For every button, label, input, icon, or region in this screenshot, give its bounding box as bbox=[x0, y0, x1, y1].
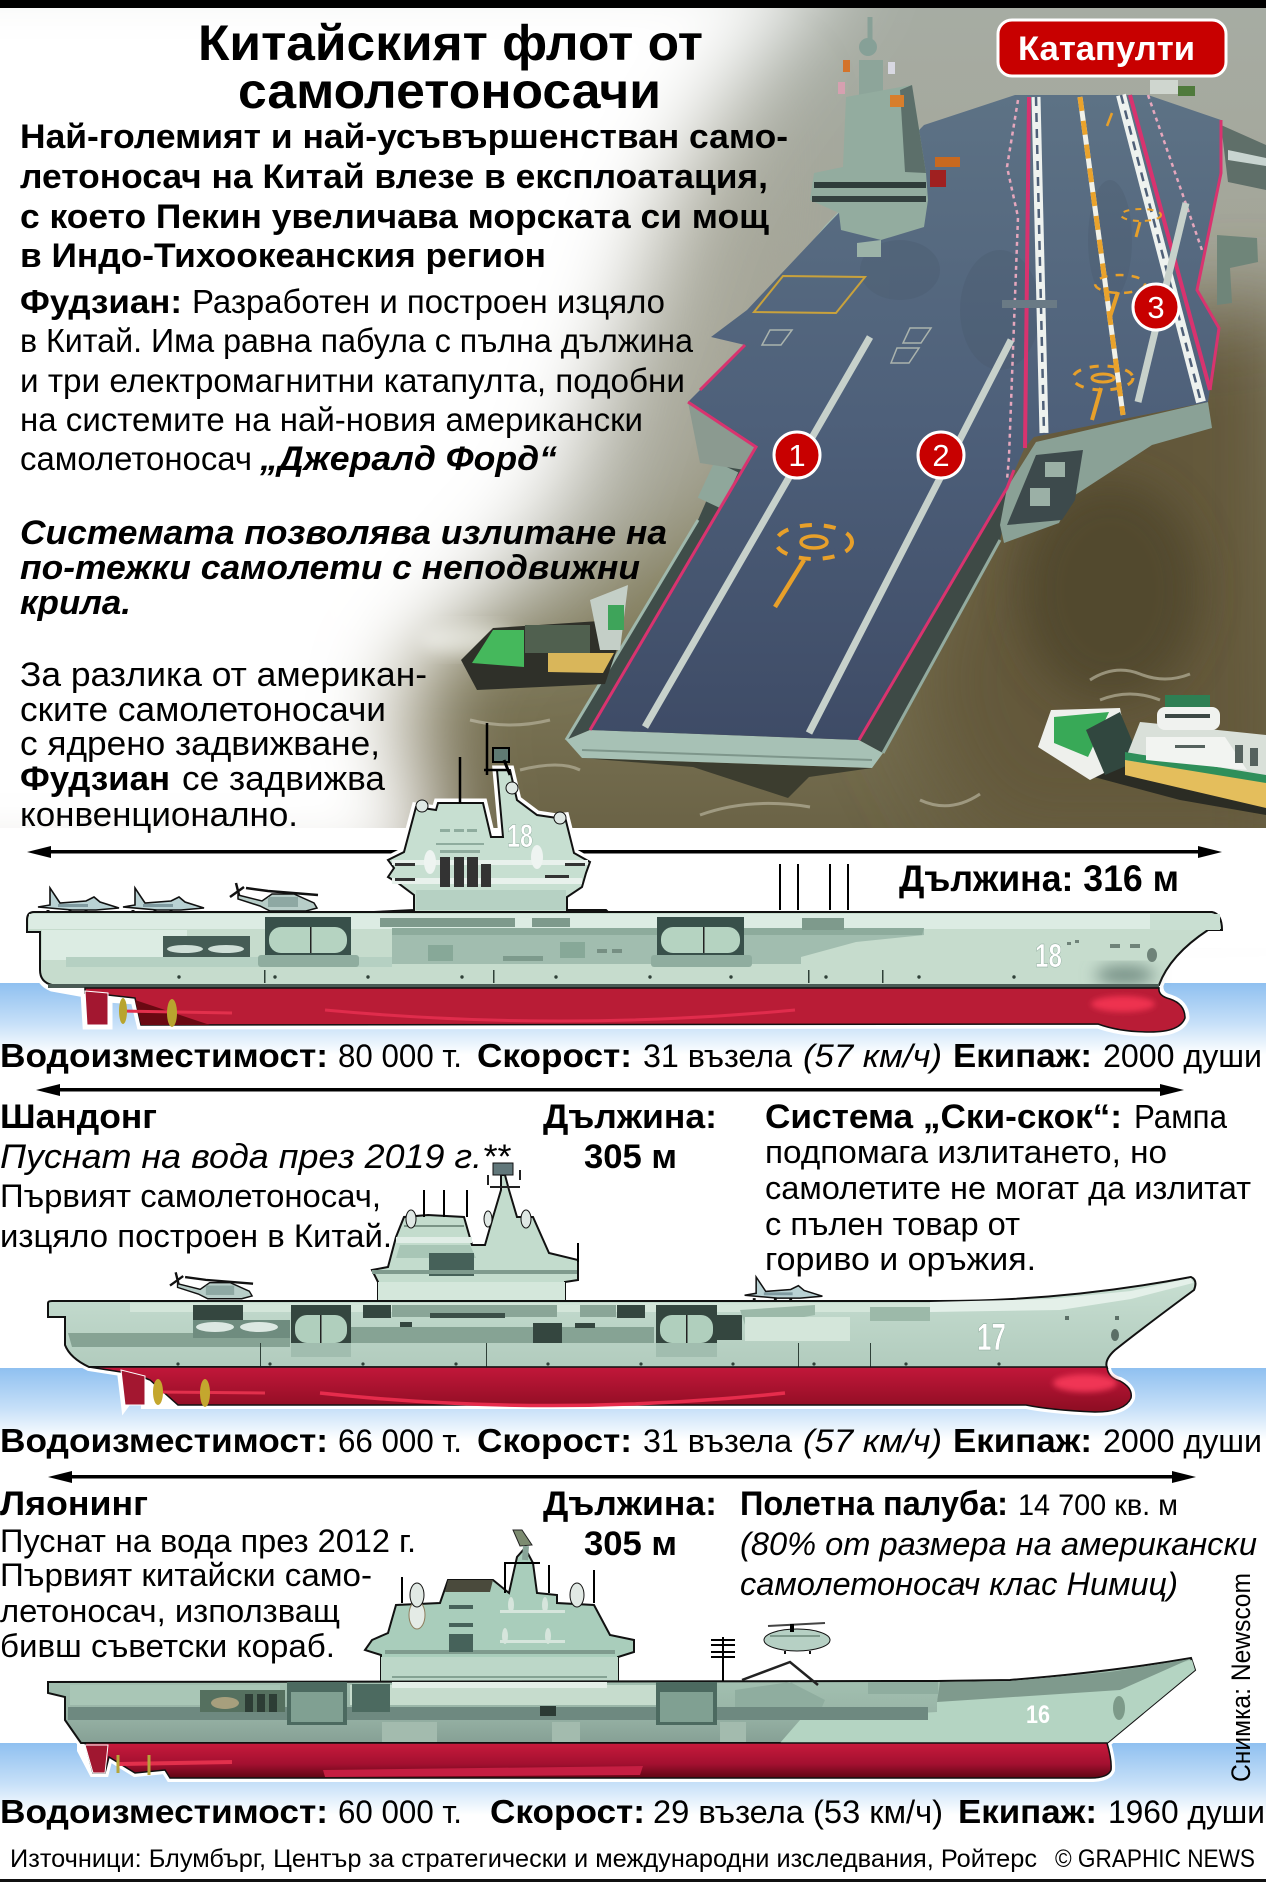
propellers bbox=[153, 1379, 265, 1407]
island bbox=[372, 1163, 578, 1301]
text block: propulsion bbox=[20, 656, 427, 834]
stats: Liaoning: Водоизместимост: bbox=[0, 1793, 328, 1830]
catapult tracks bbox=[645, 203, 1186, 733]
elevators bbox=[287, 1682, 717, 1725]
island bbox=[365, 1530, 634, 1681]
stats: Liaoning: 29 възела (53 км/ч) bbox=[653, 1794, 943, 1830]
lower hull panels bbox=[382, 1722, 746, 1742]
catapult number 2: 2 bbox=[932, 438, 950, 473]
text block: Fujian description: „Джералд Форд“ bbox=[259, 440, 557, 478]
water band: Fujian bbox=[0, 983, 1266, 1055]
text block: Liaoning: Първият китайски само- bbox=[0, 1557, 372, 1593]
text block: propulsion: с ядрено задвижване, bbox=[20, 725, 380, 763]
text block: propulsion: конвенционално. bbox=[20, 796, 298, 834]
forward deck equipment bbox=[735, 1682, 938, 1707]
stats: Shandong: 2000 души bbox=[1103, 1423, 1262, 1459]
right tug boat bbox=[1038, 695, 1266, 815]
text block: propulsion: За разлика от американ- bbox=[20, 656, 427, 694]
ship: Liaoning side view bbox=[48, 1530, 1195, 1778]
deck pink edge lines bbox=[590, 120, 1221, 740]
island outline bbox=[374, 770, 608, 912]
vents row bbox=[392, 1305, 557, 1317]
flight deck bbox=[590, 95, 1221, 740]
catapult number 3 bbox=[1133, 284, 1179, 330]
stats: Shandong: 66 000 т. bbox=[338, 1423, 462, 1459]
text block: ski-jump system: самолетите не могат да излитат bbox=[765, 1170, 1251, 1206]
stats: Fujian: Водоизместимост: bbox=[0, 1037, 328, 1074]
stats: Shandong: 31 възела bbox=[643, 1423, 792, 1459]
text block: Shandong: изцяло построен в Китай. bbox=[0, 1218, 392, 1254]
text block: Fujian description: самолетоносач bbox=[20, 440, 252, 477]
text block: ski-jump system: гориво и оръжия. bbox=[765, 1241, 1036, 1277]
text block: system allows bbox=[20, 514, 667, 622]
text block: Fujian description: и три електромагнитни катапулта, подобни bbox=[20, 362, 685, 399]
hull underside at the bow bbox=[582, 758, 872, 798]
subtitle: в Индо-Тихоокеанския регион bbox=[20, 237, 546, 275]
subtitle bbox=[20, 118, 788, 275]
hull number: 18 bbox=[1035, 937, 1062, 974]
catapult number 2 bbox=[918, 432, 964, 478]
masts bbox=[460, 723, 848, 910]
portholes and ticks bbox=[176, 1343, 1001, 1367]
text block: flight deck: Полетна палуба: bbox=[740, 1485, 1008, 1523]
hangar opening bbox=[200, 1690, 285, 1712]
far tug boat bbox=[1150, 80, 1195, 96]
hull upper bbox=[27, 912, 1222, 985]
deck crane bbox=[742, 1662, 818, 1685]
title: Китайският флот от bbox=[198, 15, 703, 71]
length label: Shandong bbox=[543, 1098, 717, 1176]
helicopter bbox=[764, 1623, 830, 1654]
helicopter bbox=[170, 1272, 253, 1299]
text block: ski-jump system: с пълен товар от bbox=[765, 1206, 1020, 1242]
text block: Liaoning bbox=[0, 1523, 416, 1664]
text block: ski-jump system: Рампа bbox=[1134, 1098, 1228, 1135]
dark openings bbox=[193, 1305, 742, 1343]
propellers bbox=[119, 998, 232, 1027]
text block: Liaoning: бивш съветски кораб. bbox=[0, 1628, 335, 1664]
left tug boat bbox=[461, 585, 628, 690]
bow deck rim bbox=[566, 730, 883, 768]
text block: system allows: Системата позволява излитане на bbox=[20, 514, 667, 552]
far-side ship and sponson bbox=[1217, 125, 1266, 305]
white fade over the water bbox=[0, 0, 850, 900]
stats: Shandong: Водоизместимост: bbox=[0, 1422, 328, 1459]
island body bbox=[374, 770, 608, 912]
length arrow: Liaoning bbox=[48, 1471, 1196, 1483]
subtitle: Най-големият и най-усъвършенстван само- bbox=[20, 118, 788, 156]
forward hull light panel bbox=[780, 1660, 1195, 1743]
ship: Shandong side view bbox=[48, 1163, 1195, 1412]
text block: ski-jump system: Система „Ски-скок“: bbox=[765, 1098, 1122, 1136]
red lower hull bbox=[85, 988, 1185, 1032]
rudder bbox=[85, 991, 108, 1025]
hull upper bbox=[48, 1277, 1195, 1368]
top black bar bbox=[0, 0, 1266, 8]
length label: Liaoning bbox=[543, 1485, 717, 1563]
stats: Fujian: 2000 души bbox=[1103, 1038, 1262, 1074]
hull number: 16 bbox=[1026, 1701, 1050, 1729]
radio mast bbox=[711, 1637, 735, 1681]
stats: Liaoning: 60 000 т. bbox=[338, 1794, 462, 1830]
right sponson and stern hull bbox=[1000, 402, 1212, 543]
deck guide lines bbox=[1007, 95, 1210, 480]
stats: Shandong: Екипаж: bbox=[953, 1422, 1092, 1459]
heading: Liaoning: Ляонинг bbox=[0, 1485, 148, 1523]
text block: propulsion: Фудзиан bbox=[20, 760, 170, 798]
catapult number 1: 1 bbox=[788, 438, 806, 473]
upper left deck edge bbox=[745, 100, 1015, 336]
badge: catapults bbox=[998, 20, 1226, 76]
elevators bbox=[291, 1305, 717, 1357]
water band: Shandong bbox=[0, 1368, 1266, 1440]
hull upper bbox=[48, 1658, 1195, 1743]
length label: Shandong: Дължина: bbox=[543, 1098, 717, 1136]
text block: propulsion: ските самолетоносачи bbox=[20, 691, 386, 729]
text block: Shandong bbox=[0, 1138, 512, 1254]
aircraft on deck bbox=[38, 888, 119, 913]
panel: photo of Fujian carrier bbox=[0, 0, 1266, 948]
catapult number 3: 3 bbox=[1147, 290, 1165, 325]
text block: system allows: по-тежки самолети с неподвижни bbox=[20, 549, 640, 587]
stats: Fujian bbox=[0, 1037, 1262, 1074]
text block: ski-jump system bbox=[765, 1098, 1251, 1277]
jet bbox=[745, 1277, 822, 1301]
length label: Liaoning: Дължина: bbox=[543, 1485, 717, 1523]
hull number: 17 bbox=[977, 1317, 1006, 1359]
forward hull panels bbox=[740, 1305, 930, 1341]
subtitle: летоносач на Китай влезе в експлоатация, bbox=[20, 158, 768, 196]
text block: flight deck: 14 700 кв. м bbox=[1018, 1489, 1178, 1522]
title: самолетоносачи bbox=[238, 63, 661, 119]
aft elevator bbox=[651, 917, 752, 967]
catapult number 1 bbox=[774, 432, 820, 478]
stats: Fujian: Екипаж: bbox=[953, 1037, 1092, 1074]
stats: Fujian: (57 км/ч) bbox=[803, 1038, 942, 1074]
waterline bbox=[48, 984, 1159, 988]
text block: Fujian description bbox=[20, 283, 694, 478]
red lower hull bbox=[85, 1743, 1111, 1778]
footer sources: Източници: Блумбърг, Център за стратегически и международни изследвания, Ройтерс bbox=[10, 1845, 1037, 1873]
forward left sponson bbox=[688, 402, 756, 470]
text block: Shandong: Първият самолетоносач, bbox=[0, 1178, 381, 1214]
ship: Fujian side view bbox=[27, 723, 1222, 1032]
subtitle: с което Пекин увеличава морската си мощ bbox=[20, 198, 769, 236]
portholes and ticks bbox=[177, 970, 1016, 983]
stats: Shandong bbox=[0, 1422, 1262, 1459]
rudder bbox=[85, 1745, 108, 1773]
heading: Shandong: Шандонг bbox=[0, 1098, 157, 1136]
length arrow: Shandong bbox=[36, 1084, 1184, 1096]
text block: Fujian description: Разработен и построен изцяло bbox=[192, 283, 665, 320]
hull number on island: 18 bbox=[507, 818, 533, 854]
text block: flight deck: (80% от размера на американски bbox=[740, 1526, 1257, 1562]
hangar with boats bbox=[163, 936, 250, 957]
text block: ski-jump system: подпомага излитането, но bbox=[765, 1134, 1167, 1170]
length arrow: Fujian bbox=[27, 846, 1222, 858]
propellers bbox=[118, 1755, 232, 1775]
stats: Shandong: (57 км/ч) bbox=[803, 1423, 942, 1459]
photo credit: Снимка: Newscom bbox=[1226, 1573, 1256, 1782]
stats: Fujian: 80 000 т. bbox=[338, 1038, 462, 1074]
text block: Fujian description: Фудзиан: bbox=[20, 283, 182, 320]
water band: Liaoning bbox=[0, 1743, 1266, 1815]
text block: flight deck bbox=[740, 1485, 1257, 1602]
superstructure band bbox=[392, 928, 924, 964]
helicopter bbox=[230, 883, 318, 911]
stats: Liaoning: Скорост: bbox=[490, 1793, 645, 1830]
stats: Fujian: Скорост: bbox=[477, 1037, 632, 1074]
helipad markings bbox=[754, 113, 1161, 607]
left hull side rim bbox=[566, 447, 756, 740]
stats: Liaoning bbox=[0, 1793, 1265, 1830]
stats: Shandong: Скорост: bbox=[477, 1422, 632, 1459]
stats: Fujian: 31 възела bbox=[643, 1038, 792, 1074]
hull outline bbox=[27, 912, 1222, 1032]
stats: Liaoning: 1960 души bbox=[1108, 1794, 1265, 1830]
rudder bbox=[121, 1370, 145, 1405]
text block: flight deck: самолетоносач клас Нимиц) bbox=[740, 1566, 1178, 1602]
text block: propulsion: се задвижва bbox=[182, 760, 385, 798]
text block: Liaoning: Пуснат на вода през 2012 г. bbox=[0, 1523, 416, 1559]
stats: Liaoning: Екипаж: bbox=[958, 1793, 1097, 1830]
forward elevator bbox=[258, 917, 359, 967]
text block: system allows: крила. bbox=[20, 584, 131, 622]
deck vehicles bbox=[930, 157, 960, 187]
text block: Fujian description: на системите на най-новия американски bbox=[20, 401, 643, 438]
red lower hull bbox=[89, 1367, 1131, 1412]
boats in hangar bbox=[193, 1320, 290, 1338]
title bbox=[198, 15, 703, 119]
hangar band bbox=[68, 1333, 290, 1347]
length label: Liaoning: 305 м bbox=[584, 1525, 677, 1563]
bottom black bar bbox=[0, 1879, 1266, 1882]
text block: Fujian description: в Китай. Има равна пабула с пълна дължина bbox=[20, 322, 694, 359]
text block: Shandong: Пуснат на вода през 2019 г.** bbox=[0, 1138, 512, 1176]
carrier island bbox=[810, 17, 928, 257]
length label: Shandong: 305 м bbox=[584, 1138, 677, 1176]
vents row bbox=[380, 918, 844, 930]
side band bbox=[68, 1707, 928, 1720]
right hull side rim bbox=[859, 488, 1012, 753]
deck lip bbox=[29, 914, 1219, 929]
length label: Fujian: Дължина: 316 м bbox=[899, 858, 1179, 899]
text block: Liaoning: летоносач, използващ bbox=[0, 1593, 340, 1629]
badge: catapults: Катапулти bbox=[1018, 30, 1195, 68]
